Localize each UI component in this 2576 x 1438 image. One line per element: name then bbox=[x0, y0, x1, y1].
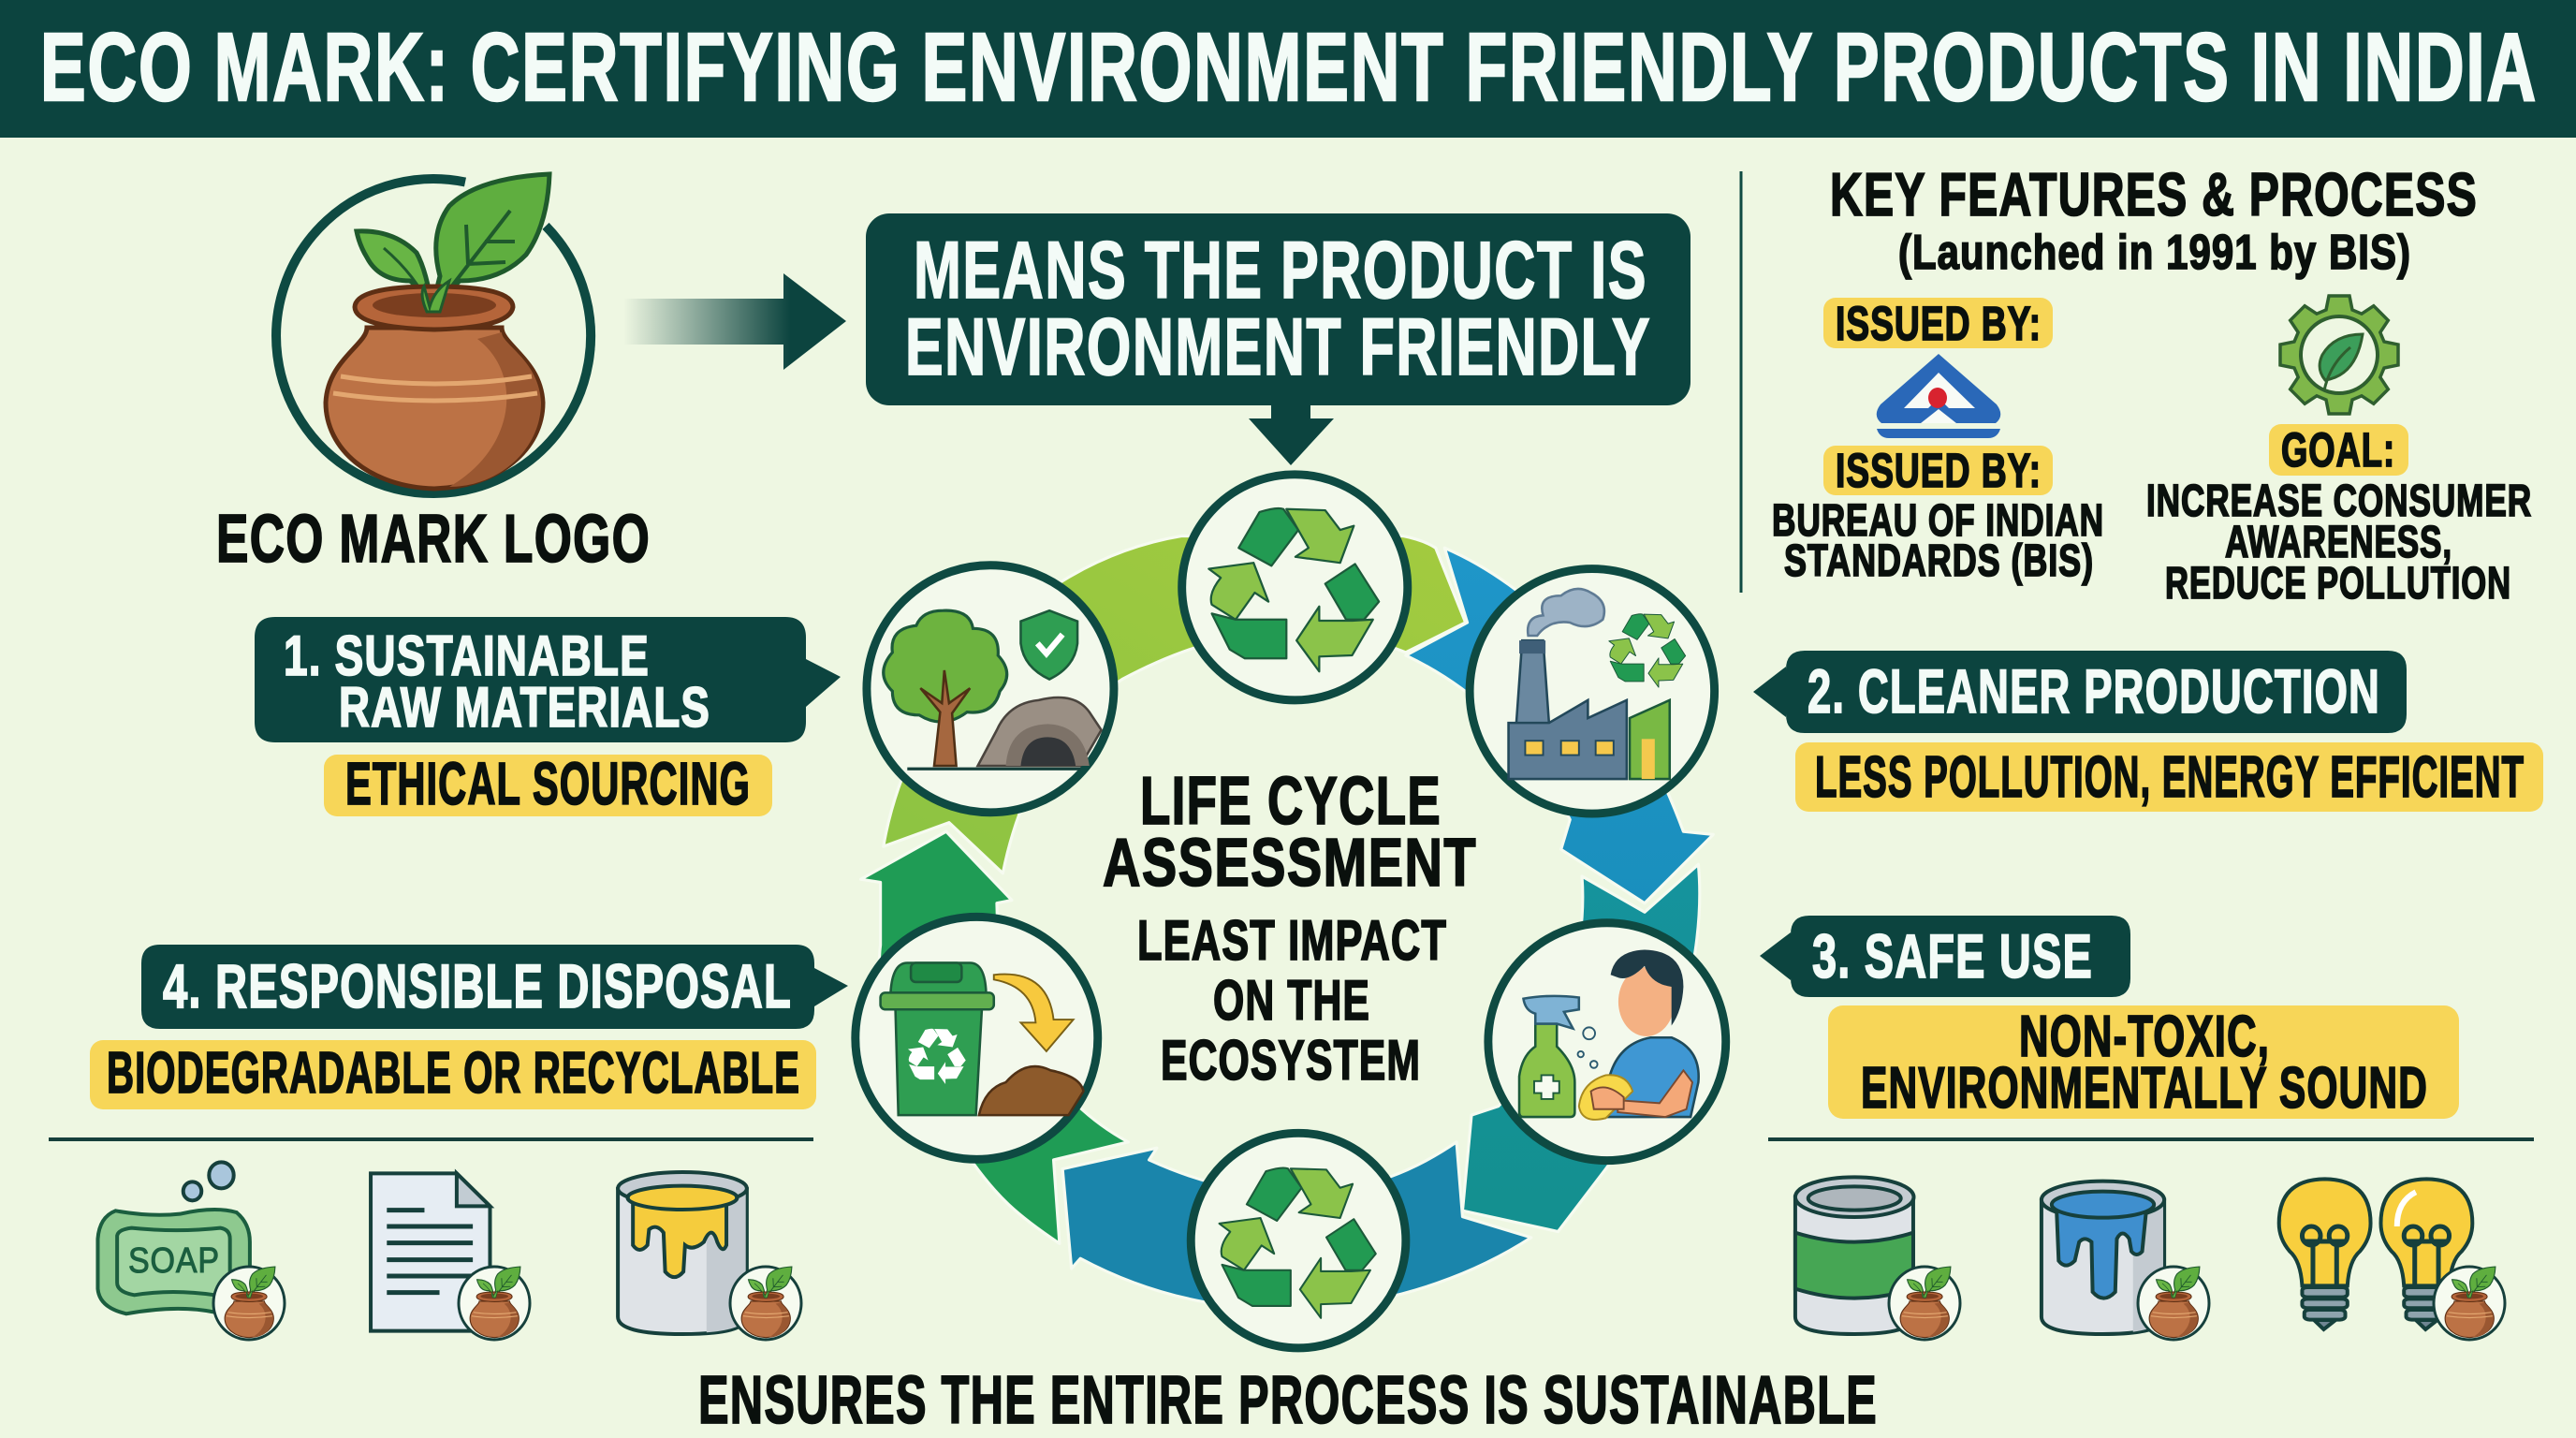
icon: food can product bbox=[1795, 1177, 1960, 1340]
tag: non-toxic environmentally sound bbox=[1828, 1005, 2459, 1121]
icon: recycling bin circle bbox=[856, 917, 1098, 1159]
arrow: deep blue segment bbox=[1062, 1142, 1531, 1309]
tag: goal: GOAL: bbox=[2281, 423, 2395, 477]
central text: life cycle assessment: LIFE CYCLE bbox=[1140, 764, 1442, 839]
icon: light bulbs product bbox=[2279, 1179, 2505, 1340]
tag: ethical sourcing: ETHICAL SOURCING bbox=[345, 750, 751, 817]
icon: yellow paint can bbox=[618, 1172, 801, 1340]
arrow: logo to meaning bbox=[623, 273, 846, 370]
callout: means the product is environment friendly: MEANS THE PRODUCT IS bbox=[914, 226, 1647, 315]
footer statement: ENSURES THE ENTIRE PROCESS IS SUSTAINABLE bbox=[698, 1363, 1878, 1438]
callout: means the product is environment friendly: ENVIRONMENT FRIENDLY bbox=[905, 302, 1651, 392]
life cycle ring arrows bbox=[861, 536, 1713, 1309]
icon: tree and mine circle bbox=[867, 565, 1114, 813]
arrow: blue segment bbox=[1406, 548, 1713, 903]
callout: step 4 responsible disposal: 4. RESPONSIBLE DISPOSAL bbox=[163, 951, 792, 1020]
icon: soap product: SOAP bbox=[128, 1241, 220, 1281]
tag: biodegradable or recyclable: BIODEGRADABLE OR RECYCLABLE bbox=[107, 1041, 800, 1106]
tag: ethical sourcing bbox=[324, 750, 772, 817]
divider: key features bbox=[1739, 171, 1743, 593]
panel: key features and process bbox=[1772, 160, 2532, 609]
text: goal description: AWARENESS, bbox=[2225, 518, 2452, 567]
tag: issued by bottom: ISSUED BY: bbox=[1836, 444, 2042, 497]
icon: BIS logo bbox=[1877, 354, 2000, 438]
callout: step 3 safe use: 3. SAFE USE bbox=[1812, 921, 2093, 990]
callout: step 1 sustainable raw materials: 1. SUSTAINABLE bbox=[284, 624, 650, 687]
eco mark logo caption: ECO MARK LOGO bbox=[216, 502, 651, 577]
arrow: green segment bbox=[861, 831, 1128, 1243]
central text: life cycle assessment: ASSESSMENT bbox=[1103, 826, 1477, 901]
callout: step 3 safe use bbox=[1760, 916, 2130, 997]
callout: means the product is environment friendly bbox=[866, 213, 1690, 465]
icon: paper product bbox=[371, 1173, 530, 1340]
icon: eco mark logo bbox=[276, 174, 591, 493]
icon: top recycle circle bbox=[1182, 475, 1408, 700]
icon: green gear leaf bbox=[2280, 296, 2398, 414]
callout: step 1 sustainable raw materials: RAW MATERIALS bbox=[339, 676, 710, 739]
arrow: teal segment bbox=[1462, 864, 1700, 1232]
callout: step 4 responsible disposal bbox=[141, 945, 848, 1029]
callout: step 2 cleaner production bbox=[1753, 651, 2407, 733]
callout: step 1 sustainable raw materials bbox=[255, 617, 841, 742]
icon: factory circle bbox=[1470, 569, 1715, 814]
central text: life cycle assessment: ECOSYSTEM bbox=[1161, 1029, 1421, 1092]
icon: person cleaning circle bbox=[1488, 923, 1726, 1161]
arrow: light green segment bbox=[884, 536, 1466, 873]
divider: right products bbox=[1768, 1137, 2534, 1141]
text: bureau of indian standards: BUREAU OF INDIAN bbox=[1772, 496, 2104, 546]
divider: left products bbox=[49, 1137, 813, 1141]
tag: non-toxic environmentally sound: NON-TOXIC, bbox=[2019, 1005, 2270, 1069]
subheading: launched in 1991: (Launched in 1991 by BIS) bbox=[1898, 226, 2411, 280]
text: goal description bbox=[2146, 477, 2532, 609]
text: bureau of indian standards bbox=[1772, 496, 2104, 586]
tag: issued by top: ISSUED BY: bbox=[1836, 297, 2042, 350]
text: bureau of indian standards: STANDARDS (BIS) bbox=[1784, 536, 2094, 586]
icon: blue paint can bbox=[2042, 1181, 2209, 1340]
central text: life cycle assessment: LEAST IMPACT bbox=[1137, 909, 1447, 972]
central text: life cycle assessment bbox=[1103, 764, 1477, 1092]
tag: biodegradable or recyclable bbox=[90, 1040, 816, 1109]
icon: bottom recycle circle bbox=[1191, 1133, 1406, 1348]
icon: soap product bbox=[97, 1162, 285, 1340]
central text: life cycle assessment: ON THE bbox=[1213, 969, 1370, 1032]
